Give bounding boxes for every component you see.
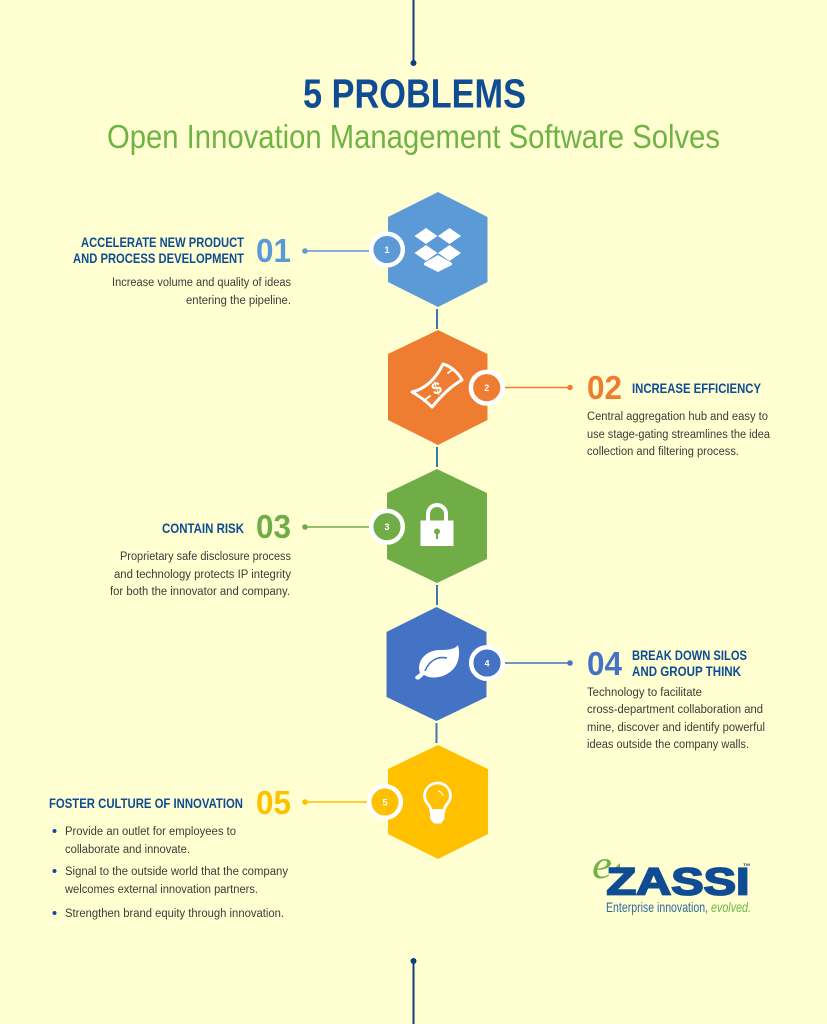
bullet list 5: Strengthen brand equity through innovation. [65, 908, 284, 920]
icon: dropbox [414, 228, 461, 272]
body 3: and technology protects IP integrity [114, 569, 291, 581]
body 1 [112, 277, 291, 307]
connector and dot 5 [302, 799, 367, 805]
body 4: ideas outside the company walls. [587, 739, 749, 751]
number badge 3: 3 [384, 522, 390, 532]
hexagon 5 [388, 745, 488, 859]
icon: banknote [412, 364, 462, 407]
heading 4: BREAK DOWN SILOS [632, 647, 747, 663]
heading 4 [632, 647, 747, 679]
panel: step 4 [386, 607, 765, 751]
body 3 [110, 551, 291, 598]
heading 1: ACCELERATE NEW PRODUCT [81, 234, 244, 250]
connector and dot 3 [302, 524, 369, 530]
logo: eZASSI: evolved. [711, 899, 751, 915]
number 05: 05 [256, 784, 291, 821]
body 2: collection and filtering process. [587, 446, 739, 458]
body 4: cross-department collaboration and [587, 704, 763, 716]
connector and dot 1 [302, 248, 369, 254]
number badge 1: 1 [384, 245, 390, 255]
hexagon 2 [388, 330, 488, 445]
body 3: Proprietary safe disclosure process [120, 551, 291, 563]
bullet list 5 [52, 826, 288, 920]
hexagon connector segments [436, 309, 438, 743]
panel: step 2 [388, 330, 771, 458]
connector and dot 2 [505, 385, 573, 390]
bullet list 5: Signal to the outside world that the company [65, 866, 288, 878]
icon: leaf [415, 645, 459, 680]
number badge 5: 5 [382, 798, 388, 808]
number 02: 02 [587, 369, 622, 406]
number badge 2: 2 [484, 383, 489, 393]
body 4: mine, discover and identify powerful [587, 722, 765, 734]
heading 1 [73, 234, 244, 266]
number badge 4: 4 [484, 658, 490, 668]
body 1: Increase volume and quality of ideas [112, 277, 291, 289]
number badge 2 [471, 372, 503, 404]
body 4 [587, 687, 765, 751]
body 2: use stage-gating streamlines the idea [587, 429, 771, 441]
heading 3: CONTAIN RISK [162, 520, 244, 536]
body 2 [587, 411, 771, 458]
connector and dot 4 [505, 660, 573, 666]
title: 5 PROBLEMS [303, 70, 526, 116]
hexagon 4 [386, 607, 486, 721]
number 04: 04 [587, 645, 623, 682]
bullet list 5: welcomes external innovation partners. [64, 884, 258, 896]
logo: eZASSI [592, 842, 751, 915]
number 01: 01 [256, 232, 291, 269]
bottom connector line [410, 958, 416, 1024]
hexagon 3 [387, 469, 487, 583]
bullet list 5: collaborate and innovate. [65, 844, 190, 856]
number badge 1 [371, 234, 403, 265]
number 03: 03 [256, 508, 291, 545]
body 1: entering the pipeline. [186, 295, 291, 307]
panel: step 1 [73, 192, 488, 307]
heading 2: INCREASE EFFICIENCY [632, 380, 762, 396]
heading 5: FOSTER CULTURE OF INNOVATION [49, 795, 243, 811]
icon: banknote: $ [429, 378, 445, 399]
heading 1: AND PROCESS DEVELOPMENT [73, 250, 244, 266]
heading 4: AND GROUP THINK [632, 663, 741, 679]
logo: eZASSI: ZASSI [606, 862, 750, 904]
panel: step 5 [49, 745, 488, 920]
hexagon 1 [388, 192, 488, 307]
title: Open Innovation Management Software Solves [107, 118, 720, 155]
number badge 5 [369, 786, 401, 818]
logo: eZASSI: TM [743, 862, 751, 867]
logo: eZASSI: e [592, 842, 612, 887]
icon: light bulb [424, 783, 450, 824]
number badge 4 [471, 647, 503, 679]
panel: step 3 [110, 469, 487, 598]
icon: padlock [420, 505, 454, 546]
title [107, 70, 720, 155]
logo: eZASSI: Enterprise innovation, [606, 899, 708, 915]
number badge 3 [371, 511, 403, 542]
body 2: Central aggregation hub and easy to [587, 411, 768, 423]
body 4: Technology to facilitate [587, 687, 702, 699]
top connector line [410, 0, 416, 66]
bullet list 5: Provide an outlet for employees to [65, 826, 236, 838]
body 3: for both the innovator and company. [110, 586, 290, 598]
